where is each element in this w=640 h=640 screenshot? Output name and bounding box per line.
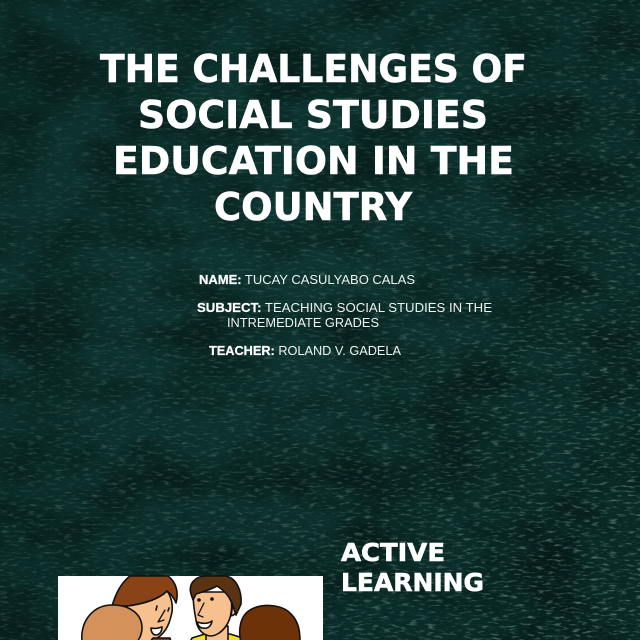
subject lines [197,300,492,330]
student seen from behind, left [82,605,142,640]
title: EDUCATION IN THE [113,139,514,183]
woman [112,576,177,640]
teacher line: TEACHER: ROLAND V. GADELA [209,343,401,358]
subject lines: INTREMEDIATE GRADES [227,315,379,330]
title: THE CHALLENGES OF [100,47,527,91]
title: SOCIAL STUDIES [138,93,488,137]
student seen from behind, right [240,605,300,640]
man [190,576,243,640]
heading: active learning: ACTIVE [341,538,445,567]
subject lines: SUBJECT: TEACHING SOCIAL STUDIES IN THE [197,300,492,315]
name line: NAME: TUCAY CASULYABO CALAS [199,272,415,287]
heading: active learning [341,538,484,597]
illustration: group of students [58,576,323,640]
title: COUNTRY [214,185,412,229]
title [100,47,527,229]
heading: active learning: LEARNING [341,568,484,597]
